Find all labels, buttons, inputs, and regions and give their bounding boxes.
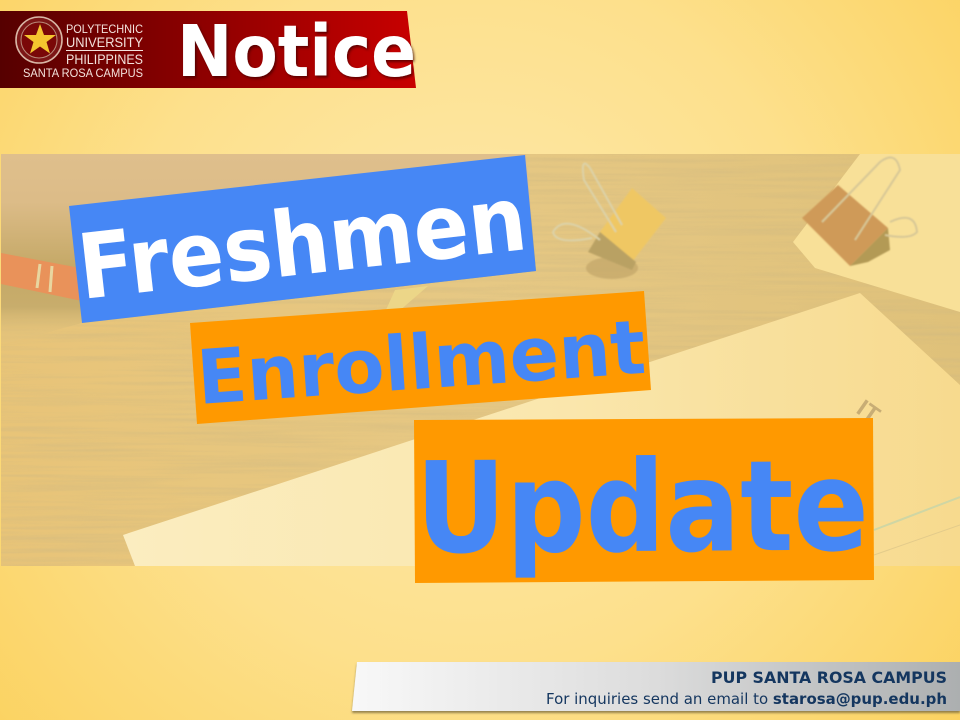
- paper top right: [793, 154, 960, 312]
- university name: [23, 22, 144, 80]
- footer campus name: PUP SANTA ROSA CAMPUS: [711, 668, 947, 687]
- heading: Notice: Notice: [177, 10, 416, 93]
- photo band: desk with papers and binder clips: [1, 154, 960, 566]
- header banner: [0, 10, 416, 93]
- title banner: Freshmen: Freshmen: [73, 166, 532, 321]
- large paper: [123, 293, 960, 566]
- clip right: [802, 158, 917, 266]
- photo band: desk with papers and binder clips: IT: [852, 395, 885, 429]
- footer bar: [352, 662, 960, 711]
- university name: SANTA ROSA CAMPUS: [23, 66, 143, 80]
- title banner: Update: Update: [415, 433, 869, 582]
- pencil: [1, 253, 428, 312]
- university name: PHILIPPINES: [66, 51, 143, 67]
- footer contact line: For inquiries send an email to starosa@pup.edu.ph: [546, 690, 947, 708]
- logo seal: [16, 17, 62, 63]
- title banner: Enrollment: Enrollment: [194, 303, 648, 422]
- clip left: [553, 164, 666, 279]
- university name: POLYTECHNIC: [66, 22, 143, 36]
- university name: UNIVERSITY: [66, 34, 144, 50]
